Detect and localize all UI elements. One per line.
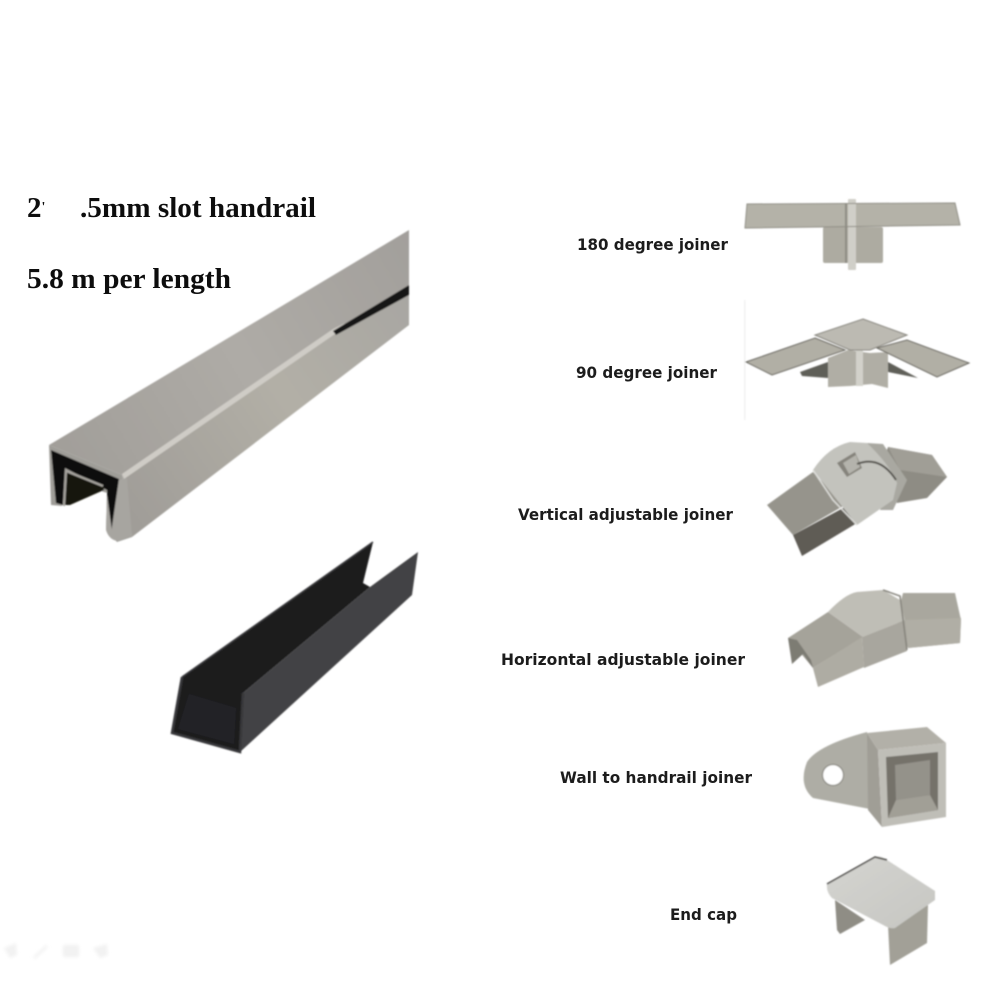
watermark icons	[4, 943, 108, 959]
label: 180 degree joiner: 180 degree joiner	[577, 235, 728, 254]
label: wall to handrail joiner: Wall to handrail joiner	[560, 768, 752, 787]
product image: 180 degree joiner	[745, 199, 960, 270]
product image: end cap	[827, 856, 935, 965]
heading: slot handrail size: 2	[27, 192, 42, 224]
label: horizontal adjustable joiner: Horizontal adjustable joiner	[501, 650, 745, 669]
heading: slot handrail size: '	[42, 200, 45, 215]
product image: 90 degree joiner	[744, 300, 969, 420]
label: 90 degree joiner: 90 degree joiner	[576, 363, 717, 382]
product image: vertical adjustable joiner	[767, 442, 947, 556]
product image: stainless slot handrail	[49, 230, 409, 542]
product image: horizontal adjustable joiner	[788, 590, 961, 687]
product image: black U channel insert	[172, 542, 418, 752]
product image: wall to handrail joiner	[804, 727, 946, 827]
label: vertical adjustable joiner: Vertical adjustable joiner	[518, 505, 733, 524]
heading: length per piece: 5.8 m per length	[27, 263, 231, 295]
label: end cap: End cap	[670, 905, 737, 924]
heading: slot handrail size: .5mm slot handrail	[80, 192, 316, 224]
